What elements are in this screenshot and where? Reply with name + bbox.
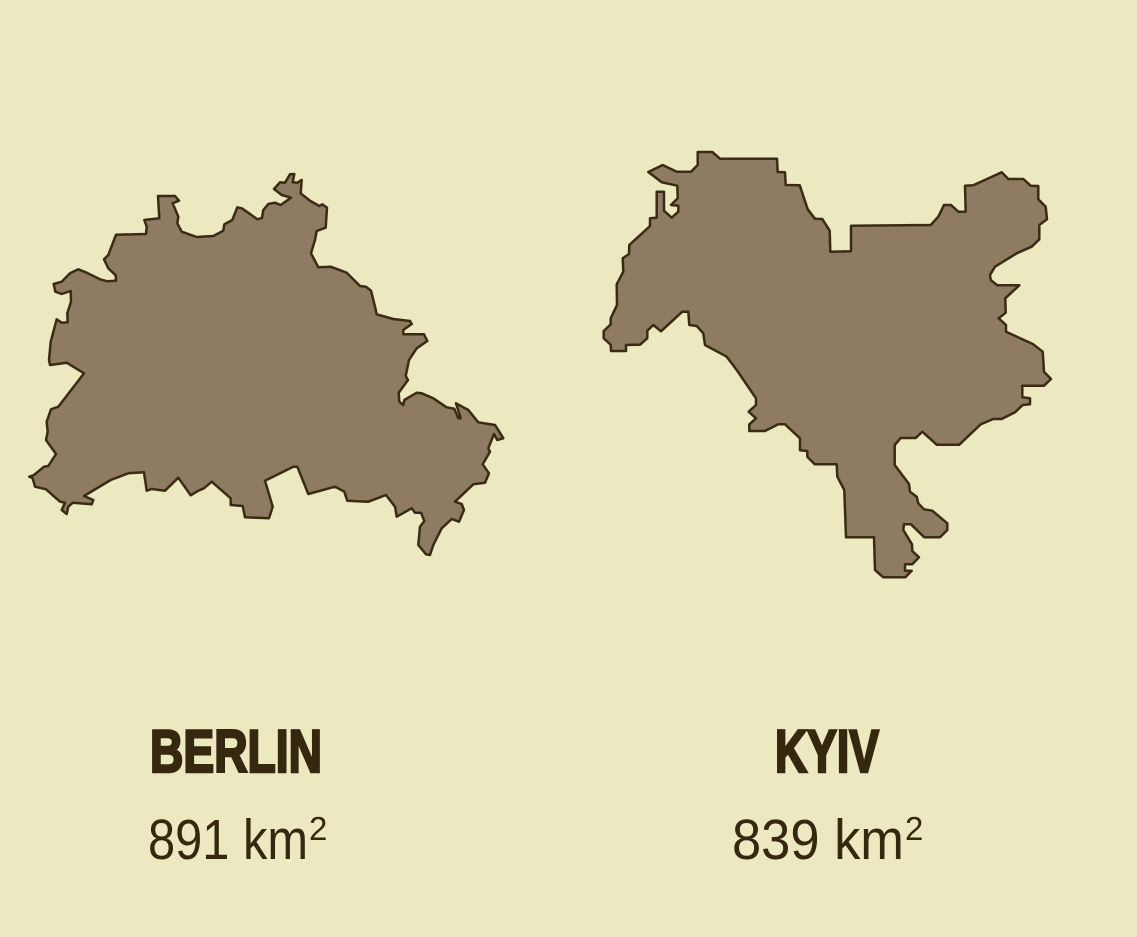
text: Kyiv area: 2	[905, 810, 923, 847]
map: Berlin outline	[29, 174, 503, 555]
panel: Berlin	[29, 174, 503, 872]
heading: BERLIN: BERLIN	[150, 718, 322, 785]
panel: Kyiv	[604, 152, 1051, 872]
map: Kyiv outline	[604, 152, 1051, 577]
heading: KYIV: KYIV	[775, 718, 879, 785]
text: Berlin area: 891 km	[148, 808, 308, 872]
text: Kyiv area: 839 km	[732, 808, 904, 872]
text: Berlin area: 2	[309, 810, 327, 847]
